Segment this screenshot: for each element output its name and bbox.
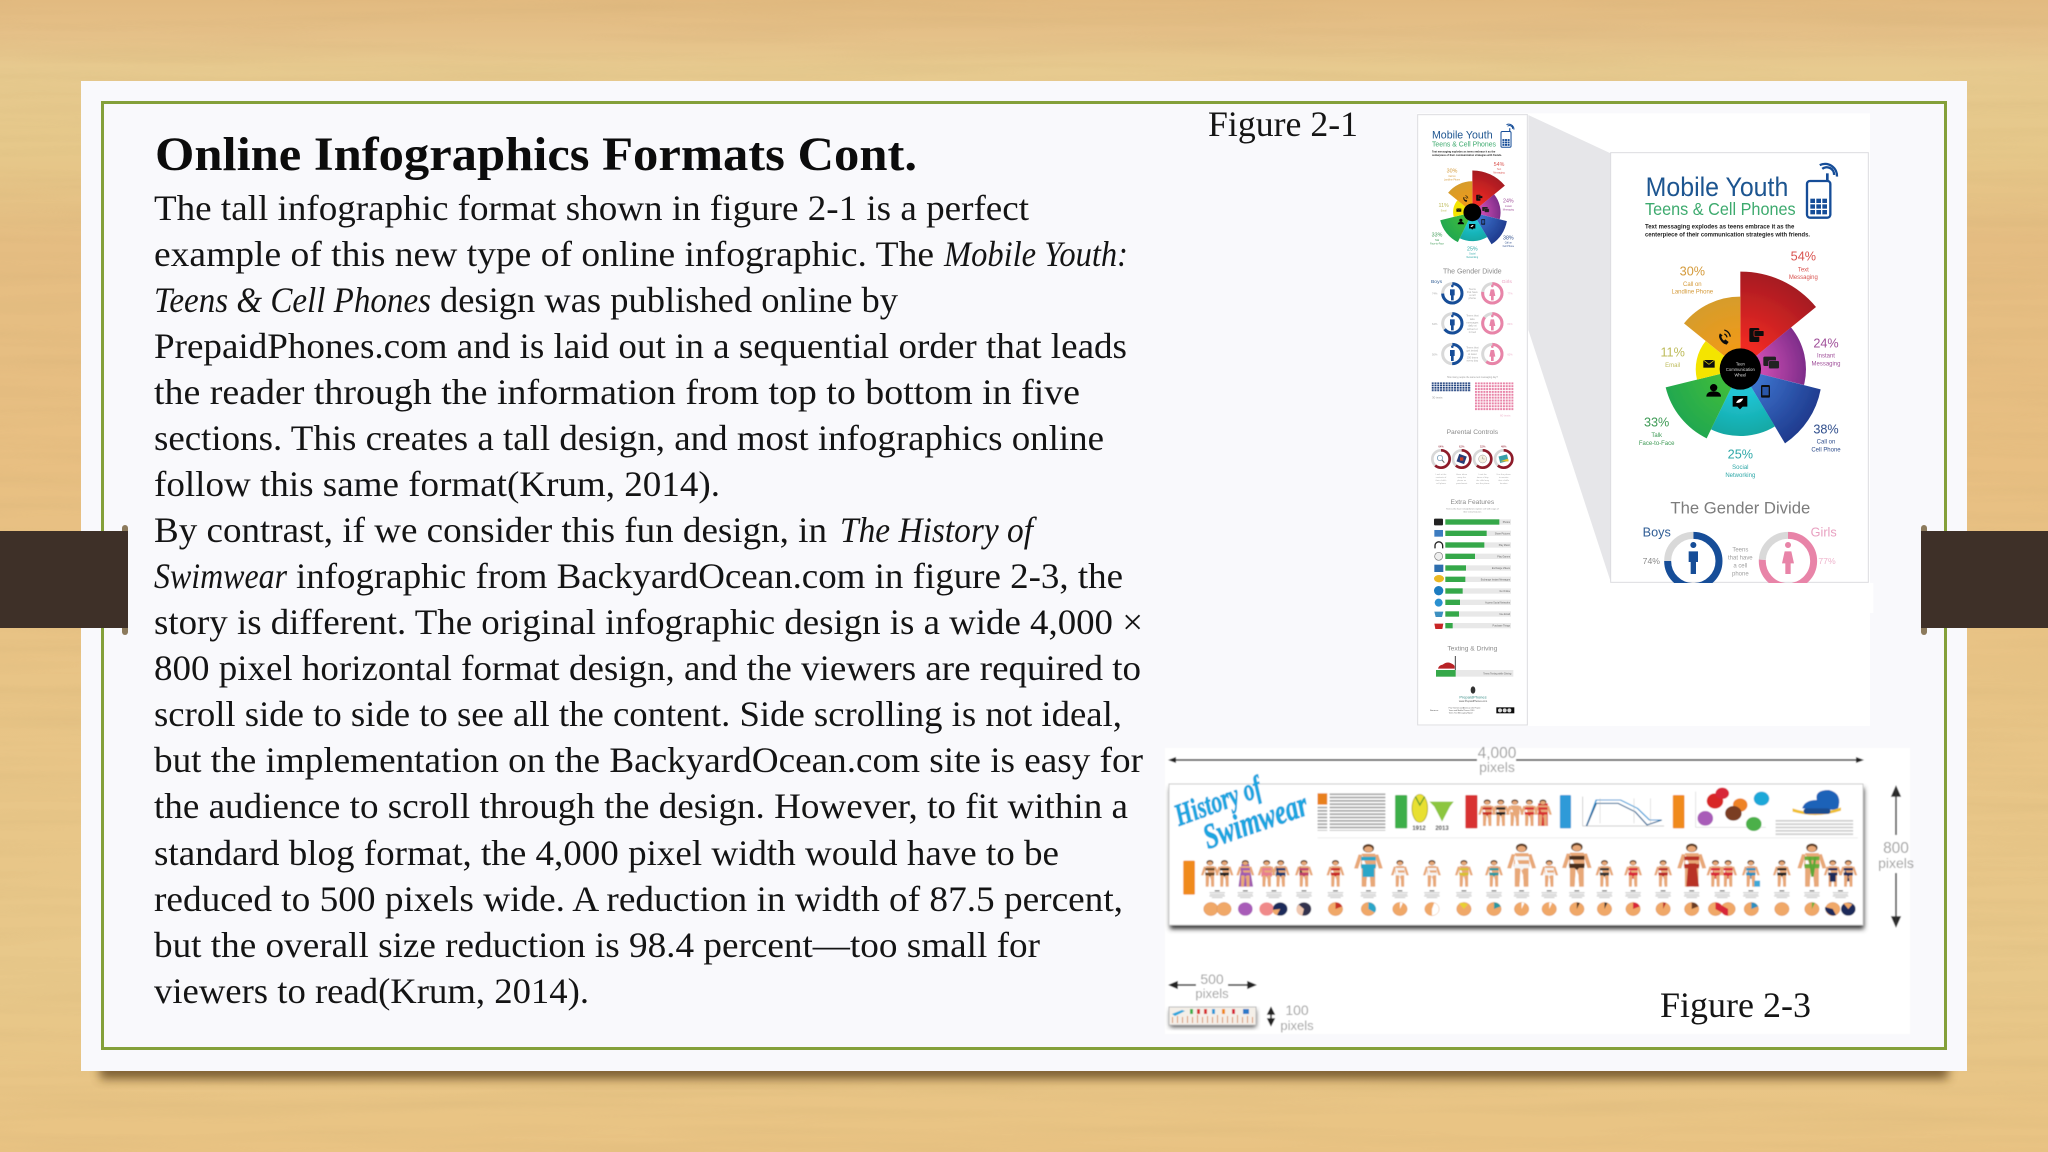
thumbnail parental controls: 64%: [1438, 444, 1444, 448]
wheel percentage labels: Call on: [1817, 439, 1835, 445]
green frame: [102, 102, 1946, 1048]
thumbnail phone icon: [1501, 123, 1515, 147]
thumbnail wheel labels: Messaging: [1503, 209, 1515, 211]
thumbnail wheel labels: Face-to-Face: [1430, 242, 1445, 245]
thumbnail parental controls: times of day: [1477, 476, 1489, 479]
thumbnail parental controls: Limit the: [1479, 473, 1488, 476]
body text: the reader through the information from top to bottom in five: [154, 372, 1080, 412]
thumbnail parental controls: 62%: [1459, 444, 1465, 448]
thumbnail gender divide: at least: [1468, 352, 1477, 356]
width dimension arrow: [1170, 759, 1862, 761]
thumbnail parental controls: to monitor: [1499, 476, 1509, 479]
body text: PrepaidPhones.com and is laid out in a sequential order that leads: [154, 326, 1127, 366]
thumbnail wheel labels: 33%: [1432, 233, 1443, 239]
thumbnail parental controls: contents of: [1436, 476, 1447, 479]
thumbnail wheel labels: [1430, 162, 1515, 259]
figure 2-3 image panel: [1165, 745, 1914, 1034]
magnified gender divide: that have: [1728, 555, 1753, 561]
thumbnail wheel labels: Email: [1441, 210, 1447, 212]
thumbnail wheel labels: 30%: [1447, 169, 1458, 175]
dimension labels: pixels: [1280, 1018, 1314, 1033]
slide card: [81, 81, 1967, 1071]
body text: the audience to scroll through the design. However, to fit within a: [154, 786, 1128, 826]
thumbnail gender divide: in bed: [1469, 330, 1476, 334]
dimension labels: [1195, 745, 1914, 1033]
thumbnail title: centerpiece of their communication strategies with friends.: [1432, 153, 1502, 157]
mini shadow: [1170, 1010, 1256, 1027]
body text: The tall infographic format shown in figure 2-1 is a perfect: [154, 188, 1029, 228]
thumbnail parental controls: 52%: [1480, 444, 1486, 448]
thumbnail footer: PrepaidPhones: [1459, 695, 1487, 700]
blue tab and line chart: [1560, 795, 1664, 828]
years: [1412, 826, 1449, 832]
thumbnail gender divide: 74%: [1432, 292, 1438, 296]
thumbnail parental controls: away the: [1457, 476, 1467, 479]
intro paragraph: [1318, 793, 1385, 831]
magnified gender divide: The Gender Divide: [1670, 498, 1810, 517]
thumbnail extra features bars: Play Music: [1499, 545, 1511, 547]
thumbnail gender divide: Teens that: [1466, 314, 1479, 318]
thumbnail wheel labels: Text: [1497, 168, 1501, 171]
thumbnail footer: Teens and Mobile Phones 2010: [1449, 710, 1474, 712]
swimwear infographic: [1169, 768, 1863, 925]
wheel percentage labels: Messaging: [1789, 275, 1818, 281]
magnified gender divide: 77%: [1818, 556, 1836, 566]
magnified title: Text messaging explodes as teens embrace it as the: [1645, 223, 1795, 230]
thumbnail gender divide: Teens that: [1466, 345, 1479, 349]
magnified gender divide: Teens: [1732, 547, 1748, 553]
thumbnail extra features bars: Purchase Things: [1493, 625, 1511, 628]
thumbnail footer: Teens Text Messaging Report: [1449, 711, 1473, 714]
thumbnail parental controls: the child may: [1476, 479, 1490, 482]
dimension labels: pixels: [1878, 855, 1914, 871]
thumbnail parental controls: Have taken: [1456, 473, 1468, 476]
thumbnail wheel labels: 11%: [1439, 203, 1449, 209]
body text: [154, 188, 1143, 1011]
thumbnail wheel labels: Talk: [1435, 240, 1440, 242]
magnified gender divide: a cell: [1733, 563, 1747, 569]
wheel percentage labels: Cell Phone: [1811, 447, 1841, 453]
backyard ocean logo: [1793, 790, 1841, 815]
mini swimwear thumbnail: [1169, 1007, 1256, 1025]
legal text: [1776, 819, 1853, 835]
magnified infographic crop: [1607, 153, 1873, 613]
thumbnail wheel labels: 54%: [1494, 162, 1505, 168]
body text: story is different. The original infographic design is a wide 4,000 ×: [154, 602, 1143, 642]
thumbnail gender divide: 77%: [1507, 292, 1513, 296]
thumbnail extra features bars: Exchange Videos: [1492, 568, 1511, 570]
wheel percentage labels: Text: [1798, 267, 1809, 273]
thumbnail parental controls: use the phone: [1476, 482, 1490, 485]
swimwear card shadow: [1170, 788, 1864, 929]
thumbnail parental controls: location: [1500, 482, 1508, 485]
dimension labels: 100: [1285, 1002, 1309, 1018]
heading: Online Infographics Formats Cont.: [155, 128, 917, 181]
thumbnail texting grids: How many people the same text messaging day?: [1447, 376, 1498, 379]
height dimension arrow: [1892, 787, 1900, 926]
thumbnail wheel labels: Call on: [1505, 243, 1513, 245]
thumbnail gender divide: 60%: [1507, 352, 1513, 356]
wheel centre label: Wheel: [1734, 372, 1746, 377]
body text: sections. This creates a tall design, and most infographics online: [154, 418, 1104, 458]
wheel percentage labels: Instant: [1817, 353, 1835, 359]
figure 2-1 caption: Figure 2-1: [1208, 104, 1358, 144]
figure 2-3 caption: Figure 2-3: [1660, 985, 1811, 1025]
thumbnail gender divide: messages: [1466, 321, 1479, 324]
dimension labels: 800: [1883, 840, 1909, 857]
wheel percentage labels: 11%: [1660, 346, 1685, 360]
thumbnail gender divide: Boys: [1431, 279, 1443, 285]
thumbnail extra features bars: Photos: [1503, 521, 1511, 524]
thumbnail footer: www.PrepaidPhones.com: [1459, 700, 1487, 703]
thumbnail parental controls: their child's: [1436, 479, 1446, 482]
thumbnail parental controls: cell phone: [1436, 483, 1447, 485]
thumbnail texting and driving: Texting & Driving: [1447, 646, 1498, 653]
wheel percentage labels: Landline Phone: [1672, 290, 1714, 296]
figure 2-1 image panel: [1417, 113, 1873, 726]
dimension labels: pixels: [1479, 759, 1515, 775]
body text: scroll side to side to see all the content. Side scrolling is not ideal,: [154, 694, 1122, 734]
slide card shadow: [100, 1062, 1948, 1079]
thumbnail gender divide: 84%: [1507, 322, 1513, 326]
wheel percentage labels: Face-to-Face: [1639, 441, 1675, 447]
red tab and figures: [1465, 795, 1551, 828]
magnified gender divide: 74%: [1643, 556, 1660, 566]
body text: viewers to read(Krum, 2014).: [154, 971, 589, 1011]
thumbnail gender divide: take: [1470, 317, 1475, 321]
thumbnail extra features bars: Access Social Networks: [1485, 601, 1511, 604]
thumbnail wheel labels: Social: [1469, 254, 1476, 256]
thumbnail footer: [1430, 686, 1514, 714]
thumbnail wheel labels: Cell Phone: [1503, 246, 1515, 248]
thumbnail gender divide: 100 times: [1467, 355, 1479, 359]
arrow heads: [1168, 757, 1864, 763]
wheel percentage labels: Networking: [1725, 473, 1755, 479]
thumbnail gender divide: daily at: [1468, 324, 1477, 328]
body text: but the overall size reduction is 98.4 percent—too small for: [154, 925, 1040, 965]
thumbnail gender divide: phone: [1469, 296, 1477, 300]
thumbnail texting and driving: [1436, 646, 1513, 677]
thumbnail wheel labels: Call on: [1448, 176, 1456, 178]
skin exposure pies: [1204, 901, 1856, 917]
thumbnail wheel labels: 38%: [1503, 235, 1514, 241]
thumbnail texting grids: 30 texts: [1432, 396, 1443, 400]
wheel chart: [1666, 272, 1821, 443]
thumbnail gender divide: Teens: [1469, 287, 1477, 291]
dimension labels: 4,000: [1478, 745, 1517, 762]
wheel percentage labels: 33%: [1644, 416, 1669, 430]
magnified gender divide: [1607, 498, 1873, 613]
wheel centre label: Teen: [1736, 362, 1746, 367]
body text: Mobile Youth:: [943, 234, 1128, 274]
dimension labels: 500: [1200, 971, 1224, 987]
thumbnail wheel chart: [1440, 170, 1507, 244]
thumbnail parental controls: phone as: [1457, 480, 1466, 482]
swimwear title: History of: [1169, 768, 1268, 833]
body text: design was published online by: [440, 280, 898, 320]
wheel percentage labels: 38%: [1813, 422, 1839, 436]
dimension labels: pixels: [1195, 986, 1229, 1001]
thumbnail extra features bars: Play Games: [1497, 556, 1511, 558]
magnified title: centerpiece of their communication strategies with friends.: [1645, 231, 1810, 238]
magnified gender divide: Boys: [1643, 526, 1671, 540]
thumbnail title: Teens & Cell Phones: [1432, 140, 1496, 149]
thumbnail gender divide: Girls: [1502, 279, 1512, 285]
thumbnail extra features bars: Extra Features: [1451, 499, 1495, 506]
thumbnail wheel labels: 24%: [1503, 199, 1514, 205]
wheel percentage labels: Social: [1732, 465, 1748, 471]
thumbnail extra features bars: Go Online: [1500, 591, 1511, 593]
wheel percentage labels: 25%: [1728, 448, 1753, 462]
thumbnail parental controls: Look at the: [1436, 473, 1447, 476]
thumbnail texting grids: [1432, 376, 1514, 418]
years: 2013: [1435, 826, 1449, 832]
wheel percentage labels: Messaging: [1812, 361, 1840, 367]
green tab and beachwear: [1395, 794, 1454, 828]
wheel percentage labels: [1639, 250, 1841, 479]
wheel percentage labels: 30%: [1680, 265, 1705, 279]
body text: infographic from BackyardOcean.com in figure 2-3, the: [296, 556, 1123, 596]
thumbnail parental controls: their child's: [1498, 479, 1509, 482]
thumbnail parental controls: Parental Controls: [1447, 429, 1499, 436]
thumbnail gender divide: a cell: [1469, 293, 1476, 297]
thumbnail gender divide: get texted: [1466, 349, 1479, 353]
body text: but the implementation on the BackyardOcean.com site is easy for: [154, 740, 1143, 780]
thumbnail parental controls: 48%: [1501, 444, 1507, 448]
magnified title: [1645, 172, 1810, 238]
swimwear title: [1169, 768, 1313, 857]
swimwear figures row: [1202, 843, 1856, 887]
swimwear title: Swimwear: [1198, 784, 1313, 857]
wheel percentage labels: Email: [1665, 363, 1680, 369]
thumbnail parental controls: Use the phone: [1497, 473, 1511, 476]
thumbnail wheel labels: Landline Phone: [1444, 179, 1461, 181]
thumbnail parental controls: punishment: [1456, 482, 1468, 485]
body text: standard blog format, the 4,000 pixel width would have to be: [154, 833, 1059, 873]
wheel percentage labels: Talk: [1651, 433, 1662, 439]
thumbnail wheel labels: Instant: [1505, 205, 1512, 208]
wheel centre label: Communication: [1726, 367, 1755, 372]
mini 500 by 100 arrows: [1170, 982, 1274, 1025]
thumbnail title: Mobile Youth: [1432, 130, 1493, 142]
figure captions: [1209, 890, 1848, 898]
thumbnail title: [1432, 130, 1502, 157]
thumbnail gender divide: school or: [1467, 327, 1478, 331]
thumbnail gender divide: [1431, 268, 1513, 364]
body text: 800 pixel horizontal format design, and the viewers are required to: [154, 648, 1141, 688]
wheel centre label: [1726, 362, 1755, 377]
body text: reduced to 500 pixels wide. A reduction in width of 87.5 percent,: [154, 879, 1123, 919]
thumbnail footer: Sources:: [1430, 709, 1439, 712]
magnified title: Mobile Youth: [1646, 172, 1788, 202]
wheel percentage labels: 24%: [1813, 336, 1839, 350]
tall infographic thumbnail: [1418, 115, 1527, 725]
thumbnail extra features bars: Share Pictures: [1495, 532, 1511, 535]
zoom wedge: [1528, 115, 1611, 582]
magnified title: Teens & Cell Phones: [1645, 199, 1796, 219]
thumbnail extra features bars: Teens who have smartphones explore cell with ways of: [1446, 507, 1499, 510]
thumbnail wheel labels: 25%: [1467, 246, 1478, 252]
years: 1912: [1412, 826, 1426, 832]
thumbnail gender divide: every day: [1467, 359, 1479, 363]
thumbnail title: Text messaging explodes as teens embrace it as the: [1432, 150, 1496, 154]
thumbnail extra features bars: [1434, 499, 1511, 629]
body text: example of this new type of online infographic. The: [154, 234, 934, 274]
body text: Teens & Cell Phones: [154, 280, 431, 320]
thumbnail gender divide: 64%: [1432, 322, 1438, 326]
body text: follow this same format(Krum, 2014).: [154, 464, 720, 504]
divider: [1318, 837, 1858, 838]
thumbnail gender divide: that have: [1467, 290, 1478, 294]
thumbnail parental controls: [1432, 429, 1512, 485]
thumbnail gender divide: The Gender Divide: [1443, 268, 1502, 275]
thumbnail extra features bars: Use Email: [1499, 614, 1510, 616]
orange tab and bubble chart: [1673, 788, 1769, 831]
body text: Swimwear: [154, 556, 288, 596]
body text: The History of: [840, 510, 1038, 550]
thumbnail wheel labels: Networking: [1467, 256, 1479, 259]
top strip drawn in zoom coordinates: [1183, 788, 1858, 917]
thumbnail texting grids: 60 texts: [1500, 414, 1511, 418]
icon: cell phone: [1807, 161, 1840, 218]
thumbnail wheel labels: Messaging: [1493, 173, 1505, 175]
thumbnail footer: Pew Internet and American Life Project: [1449, 707, 1481, 710]
orange tab lower: [1183, 861, 1195, 895]
thumbnail extra features bars: their extra features: [1463, 511, 1481, 514]
wheel percentage labels: 54%: [1791, 250, 1816, 264]
magnified gender divide: Girls: [1811, 526, 1837, 540]
magnified gender divide: phone: [1732, 571, 1749, 577]
right binding strap: [1921, 525, 2048, 635]
thumbnail texting and driving: Teens Texting while Driving: [1483, 672, 1512, 675]
wheel percentage labels: Call on: [1683, 282, 1702, 288]
thumbnail gender divide: 50%: [1432, 352, 1438, 356]
body text: By contrast, if we consider this fun design, in: [154, 510, 827, 550]
left binding strap: [0, 525, 128, 635]
thumbnail extra features bars: Exchange Instant Messages: [1481, 578, 1511, 581]
